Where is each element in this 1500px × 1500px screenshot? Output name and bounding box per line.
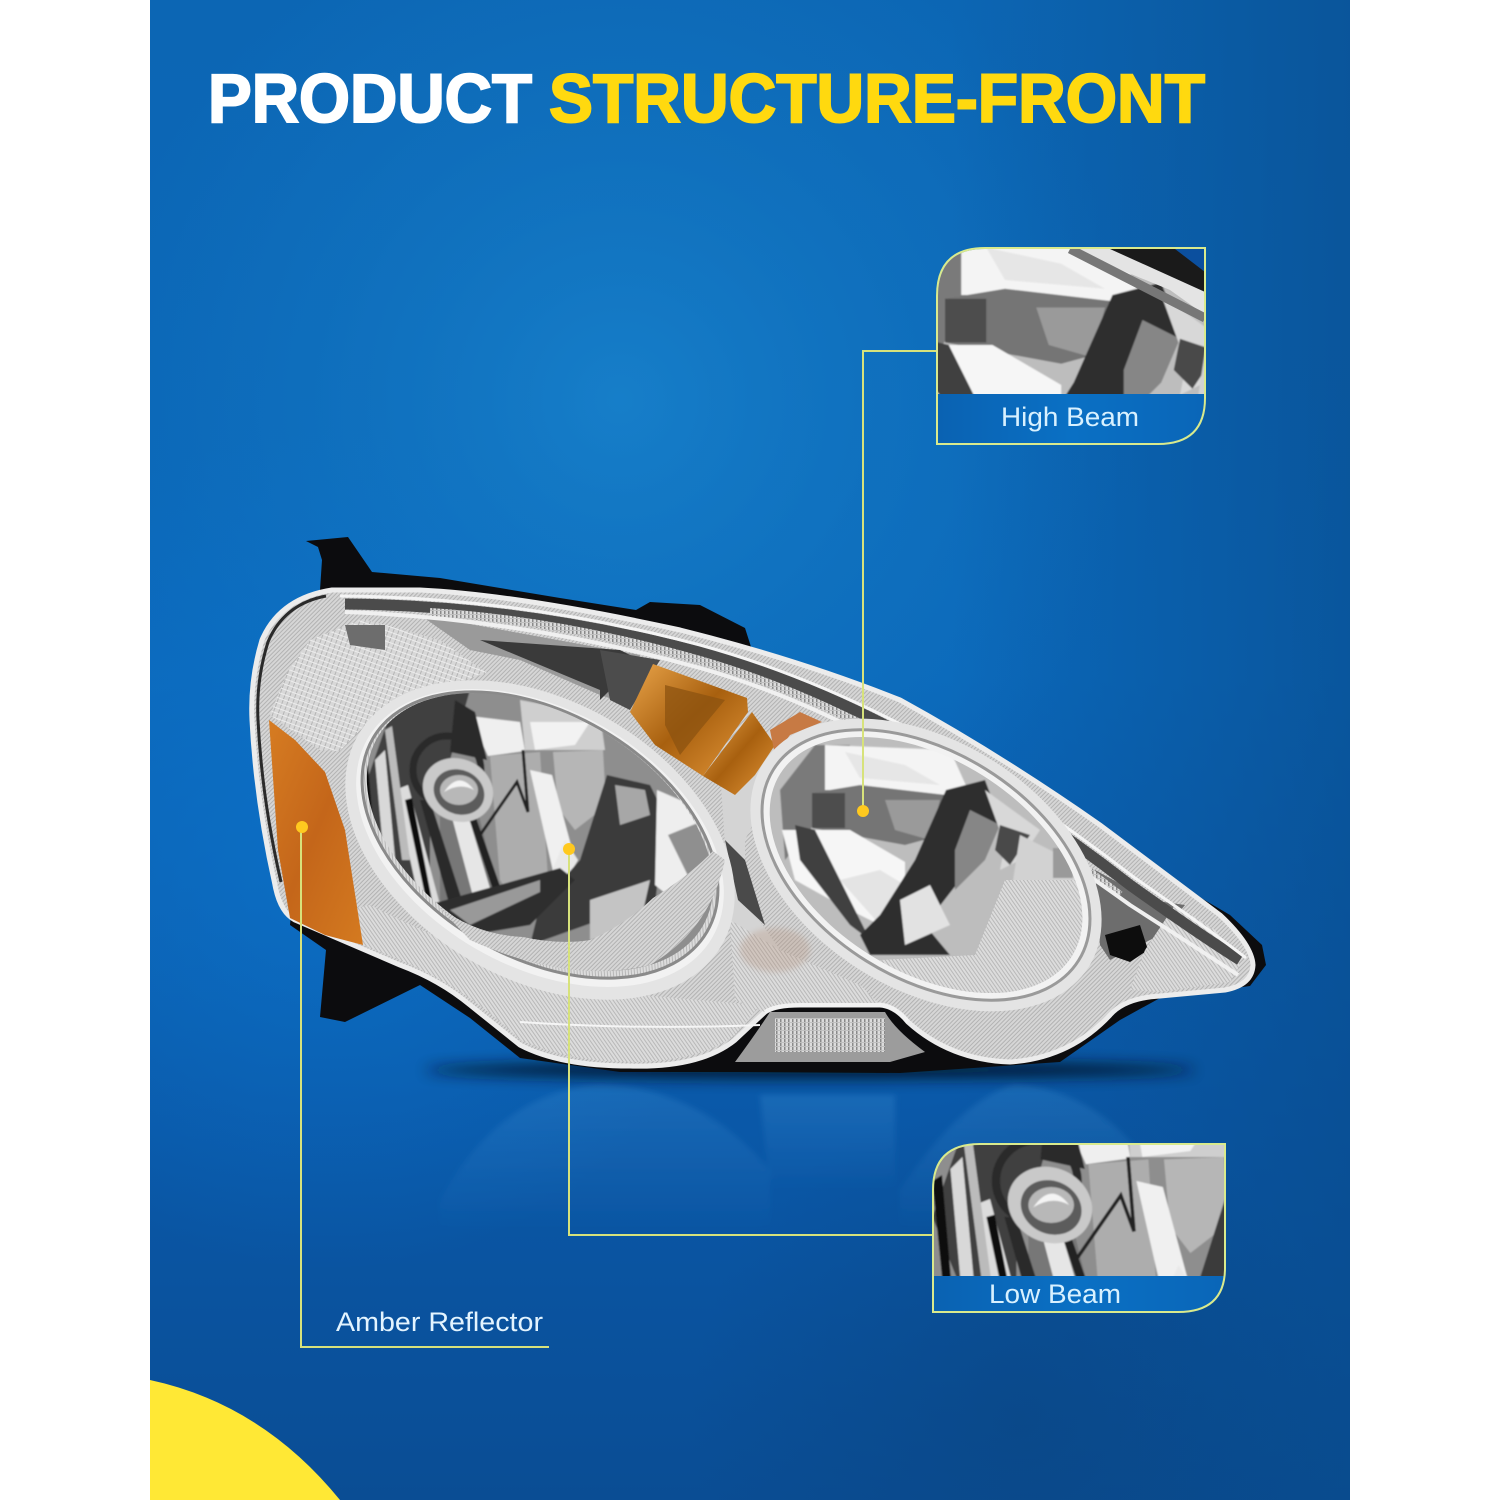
left projector ring <box>289 615 791 1065</box>
top trim ribs <box>430 612 1120 895</box>
clear corner lens <box>270 619 487 751</box>
leader line <box>301 827 549 1347</box>
left reflector <box>366 693 712 971</box>
rear clear lens <box>1130 905 1240 992</box>
bottom centre ribs <box>775 1018 885 1052</box>
top chrome line <box>340 596 1246 958</box>
high beam text: High Beam <box>1001 402 1139 432</box>
low beam label band <box>934 1276 1224 1312</box>
chrome edge highlight <box>258 596 326 882</box>
right ring inner <box>713 674 1139 1056</box>
lens body <box>252 590 1253 1066</box>
rear dark bracket <box>1105 925 1148 962</box>
left lower lens lobe <box>300 905 760 1062</box>
amber reflector <box>269 720 363 945</box>
low beam thumbnail <box>934 1145 1224 1276</box>
marker dot <box>296 821 308 833</box>
title: PRODUCT <box>208 60 532 137</box>
interior panel behind amber <box>600 650 660 710</box>
low beam frame <box>933 1144 1225 1312</box>
lower lobe highlight line <box>520 1022 760 1027</box>
callout: high beam <box>857 247 1206 817</box>
bottom centre ribbed part <box>735 1012 925 1062</box>
warm reflection <box>740 928 810 972</box>
corner lens texture <box>345 625 385 650</box>
label text: Amber Reflector <box>336 1307 543 1337</box>
left ring inner shade <box>304 628 776 1048</box>
leader line <box>569 849 934 1235</box>
title <box>208 60 1205 137</box>
high beam frame <box>937 248 1205 444</box>
dark interior shade <box>480 640 640 700</box>
floor reflection of headlight <box>440 1084 1165 1230</box>
bottom chrome bump <box>765 1005 908 1022</box>
thumbnail trim <box>1080 249 1204 312</box>
title: STRUCTURE-FRONT <box>549 60 1205 137</box>
copper accent <box>770 712 822 755</box>
amber signal dark texture <box>665 685 725 755</box>
top trim chrome <box>345 604 1240 960</box>
amber signal top <box>630 664 748 776</box>
right reflector <box>770 737 1082 993</box>
callout: amber reflector <box>296 821 549 1347</box>
high beam label band <box>938 394 1204 444</box>
headlight <box>252 537 1266 1073</box>
left projector dark rim <box>312 633 768 1037</box>
rear interior right <box>1095 870 1185 960</box>
right lower lens lobe <box>905 960 1105 1058</box>
low beam text: Low Beam <box>989 1279 1121 1309</box>
central dark gap <box>725 840 765 925</box>
marker dot <box>857 805 869 817</box>
dark interior strip <box>420 615 640 705</box>
leader line <box>863 351 938 811</box>
callout: low beam <box>563 843 1226 1313</box>
marker dot <box>563 843 575 855</box>
black housing <box>290 537 1266 1073</box>
shadow under headlight <box>425 1061 1195 1079</box>
left lens crescent <box>437 851 725 971</box>
yellow corner shape <box>150 1380 340 1500</box>
high beam thumbnail <box>938 249 1204 394</box>
central interior panel <box>720 720 825 950</box>
right projector ring <box>697 658 1155 1072</box>
top trim light line <box>345 612 1238 975</box>
lower centre chamber <box>730 920 880 1012</box>
amber signal lower <box>703 712 775 795</box>
blue gradient panel <box>150 0 1350 1500</box>
